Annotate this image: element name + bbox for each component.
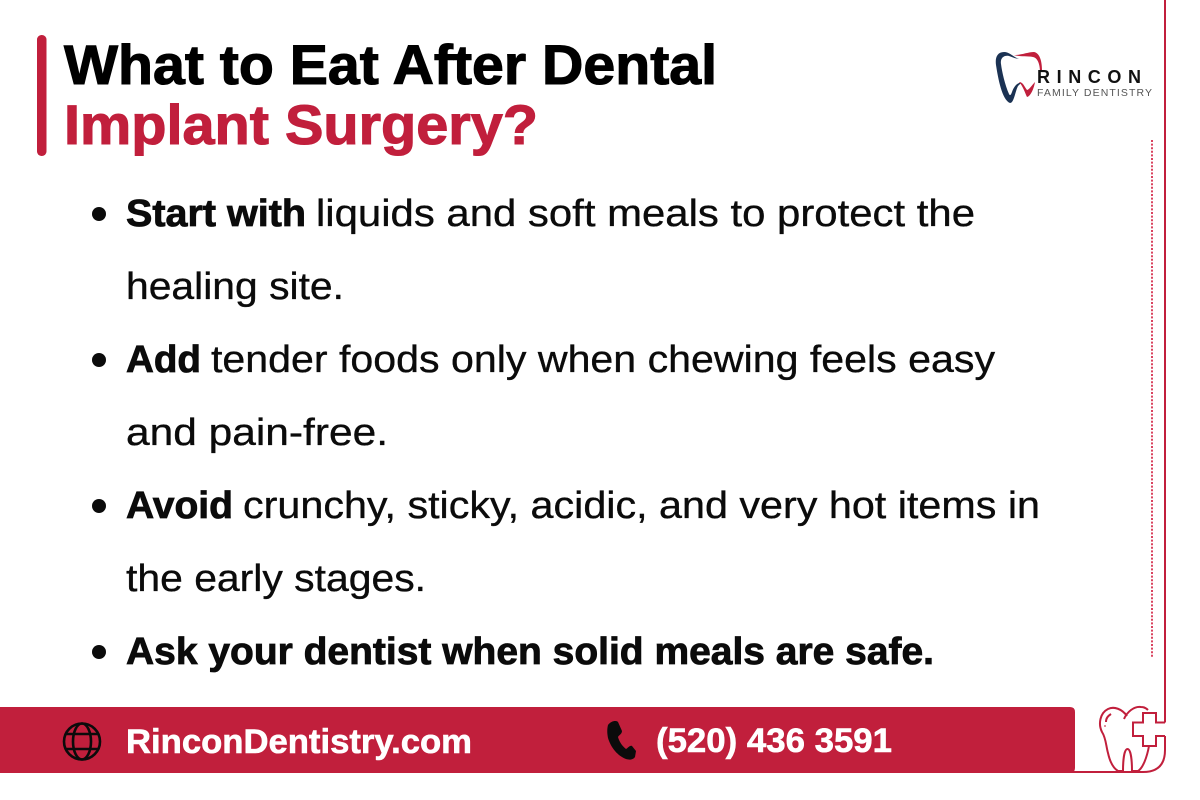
bullet 3: the early stages. bbox=[126, 558, 426, 600]
tooth outline bbox=[1100, 708, 1149, 771]
bullet 4: Ask your dentist when solid meals are safe. bbox=[126, 631, 934, 673]
phone number: (520) 436 3591 bbox=[656, 722, 892, 760]
bullet 2: and pain-free. bbox=[126, 412, 388, 454]
bullet 1: liquids and soft meals to protect the bbox=[316, 193, 975, 235]
bullet 1: Start with bbox=[126, 193, 306, 235]
bullet 2: tender foods only when chewing feels easy bbox=[211, 339, 995, 381]
logo wordmark: RINCON bbox=[1037, 67, 1141, 87]
bullet list bbox=[92, 193, 1040, 673]
title: Implant Surgery? bbox=[64, 93, 538, 156]
cross fill bbox=[1133, 713, 1166, 746]
logo tooth mark bbox=[996, 52, 1042, 103]
logo tagline: FAMILY DENTISTRY bbox=[1037, 87, 1152, 99]
title bbox=[64, 33, 717, 156]
icon: phone bbox=[607, 721, 636, 760]
title: What to Eat After Dental bbox=[64, 33, 717, 96]
bullet 2 bbox=[92, 339, 995, 454]
logo: Rincon Family Dentistry bbox=[996, 52, 1152, 103]
bullet 1 bbox=[92, 193, 975, 308]
bullet 3 bbox=[92, 485, 1040, 600]
icon: globe bbox=[64, 724, 100, 760]
icon: tooth with cross bbox=[1100, 707, 1166, 771]
bullet 3: Avoid bbox=[126, 485, 233, 527]
bullet 3: crunchy, sticky, acidic, and very hot items in bbox=[243, 485, 1040, 527]
bullet 1: healing site. bbox=[126, 266, 344, 308]
title accent bar bbox=[37, 35, 46, 156]
website: RinconDentistry.com bbox=[126, 723, 472, 761]
bullet 2: Add bbox=[126, 339, 201, 381]
page frame line bbox=[1070, 0, 1165, 772]
footer bar bbox=[0, 707, 1075, 773]
cross outline bbox=[1133, 713, 1165, 746]
dotted side line bbox=[1151, 140, 1153, 657]
